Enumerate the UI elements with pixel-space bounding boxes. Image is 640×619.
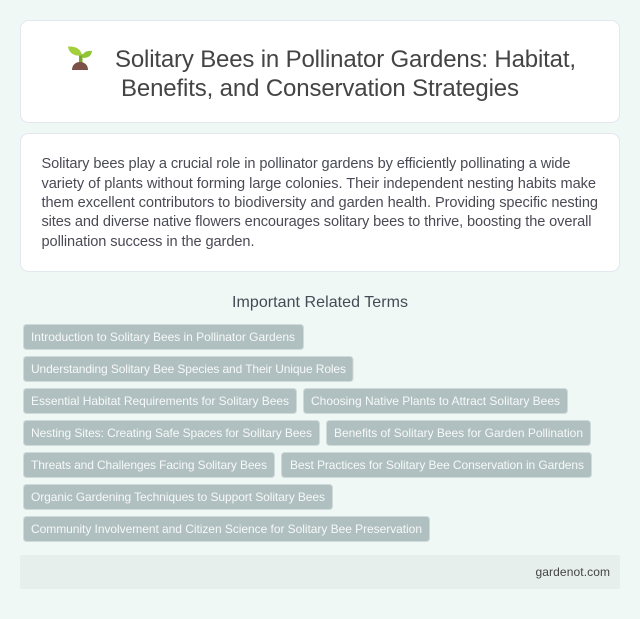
tag <box>24 452 274 478</box>
tag: Nesting Sites: Creating Safe Spaces for Solitary Bees <box>31 426 312 440</box>
tag <box>24 324 304 350</box>
tag <box>304 388 568 414</box>
tag: Understanding Solitary Bee Species and Their Unique Roles <box>31 362 346 376</box>
tag: Essential Habitat Requirements for Solitary Bees <box>31 394 289 408</box>
tag: Organic Gardening Techniques to Support Solitary Bees <box>31 490 325 504</box>
tag: Benefits of Solitary Bees for Garden Pollination <box>334 426 583 440</box>
panel: introduction <box>20 134 620 272</box>
tag: Best Practices for Solitary Bee Conservation in Gardens <box>290 458 584 472</box>
title: Benefits, and Conservation Strategies <box>121 75 519 102</box>
text block: introduction paragraph <box>42 156 598 250</box>
tag <box>24 516 430 542</box>
title <box>115 46 576 102</box>
tag: Threats and Challenges Facing Solitary Bees <box>31 458 267 472</box>
tag: Introduction to Solitary Bees in Pollinator Gardens <box>31 330 295 344</box>
heading: related terms: Important Related Terms <box>232 294 408 311</box>
text block: introduction paragraph: Solitary bees play a crucial role in pollinator gardens by efficiently pollinating a wide <box>42 156 570 172</box>
tag: Community Involvement and Citizen Science for Solitary Bee Preservation <box>31 522 422 536</box>
icon: seedling <box>68 46 92 70</box>
tag <box>326 420 590 446</box>
tag <box>24 484 332 510</box>
footer <box>20 555 620 589</box>
text block: introduction paragraph: sites and diverse native flowers encourages solitary bees to thrive, boosting the overall <box>42 214 592 230</box>
text block: introduction paragraph: them excellent contributors to biodiversity and garden health. Providing specific nesting <box>42 195 598 211</box>
tag <box>24 356 353 382</box>
title: Solitary Bees in Pollinator Gardens: Habitat, <box>115 46 576 73</box>
panel: related term tags <box>24 324 592 542</box>
text block: introduction paragraph: variety of plants without forming large colonies. Their independent nesting habits make <box>42 176 596 192</box>
footer source text: gardenot.com <box>536 565 610 579</box>
tag: Choosing Native Plants to Attract Solitary Bees <box>311 394 560 408</box>
tag <box>282 452 592 478</box>
panel: title card <box>20 20 620 122</box>
tag <box>24 388 296 414</box>
text block: introduction paragraph: pollination success in the garden. <box>42 234 254 250</box>
tag <box>24 420 320 446</box>
